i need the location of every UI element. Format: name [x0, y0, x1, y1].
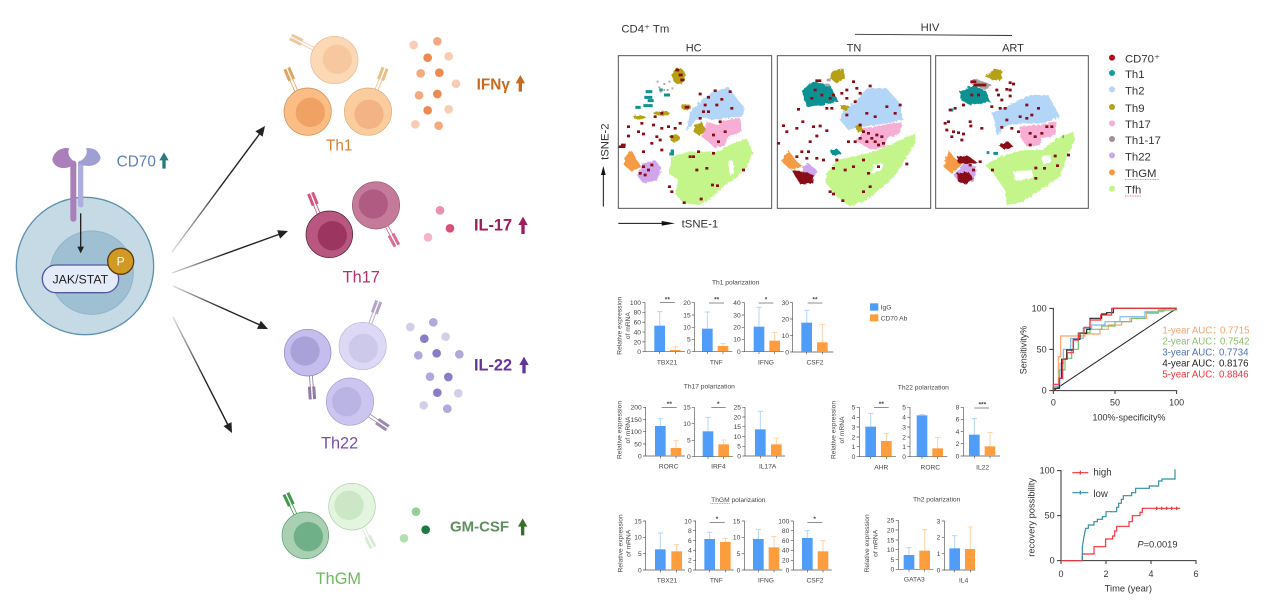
icon: phosphate: P — [117, 255, 125, 269]
legend: cell types: Th2 — [1125, 85, 1145, 97]
legend: cell types: Th1 — [1125, 69, 1145, 81]
axes and ticks: 50 — [1037, 344, 1047, 354]
axes and ticks: 50 — [1045, 511, 1055, 521]
legend: high and low — [1072, 467, 1112, 500]
bar chart: IRF4: 5 — [687, 438, 691, 445]
bar chart: TNF: 15 — [683, 312, 691, 319]
bar chart: CSF2: 20 — [782, 316, 789, 323]
bar chart: CSF2: 0 — [785, 349, 789, 356]
label: ThGM: ThGM — [316, 570, 361, 588]
bar chart: RORC: 4 — [902, 415, 906, 422]
bar chart: IL4: 2 — [937, 535, 941, 542]
bar chart: RORC — [902, 405, 947, 471]
panel: tSNE plot ART and legend — [936, 43, 1161, 208]
bar chart: RORC: 150 — [631, 417, 642, 424]
bar chart: IFNG: 40 — [733, 300, 741, 307]
bar chart: TNF: 4 — [688, 548, 692, 555]
icon: phosphate — [108, 248, 134, 274]
bar chart: IFNG: 0 — [737, 567, 741, 574]
bar chart: IL17A — [734, 405, 785, 471]
bar chart: IFNG: 0 — [737, 349, 741, 356]
axes and ticks: 0 — [1050, 556, 1055, 566]
AUC labels — [1162, 326, 1250, 381]
arrow: to Th22 — [173, 286, 268, 329]
legend: high and low: low — [1093, 489, 1108, 500]
axis title: Sensitivity: Sensitivity% — [1018, 326, 1028, 374]
curve: high — [1061, 507, 1180, 561]
bar chart: CSF2: ** — [812, 297, 818, 304]
panel: tSNE plots HC and TN — [600, 23, 931, 230]
bar chart: IFNG: IFNG — [758, 359, 774, 366]
icon: CD70 receptor — [52, 148, 101, 222]
bar chart: IRF4: 10 — [683, 421, 691, 428]
bar chart: TBX21: TBX21 — [657, 359, 677, 366]
bar chart: TNF: * — [716, 516, 719, 523]
y label: Th22 row: of mRNA — [839, 416, 846, 443]
axes and ticks: 0 — [1042, 386, 1047, 396]
panel: Th1 and Th17 cells — [283, 34, 528, 287]
panel: ThGM and Th2 polarization — [617, 497, 975, 585]
y label: Th2 row: Relative expression — [864, 514, 871, 572]
bar chart: TNF: TNF — [710, 359, 723, 366]
bar chart: RORC: ** — [667, 401, 672, 408]
bar chart: GATA3: 15 — [887, 537, 895, 544]
axes and ticks: 0 — [1058, 569, 1063, 579]
bar chart: GATA3: GATA3 — [904, 577, 925, 584]
bar chart: TBX21: 40 — [634, 329, 641, 336]
AUC labels: 0.8846 — [1219, 370, 1249, 381]
bar chart: TBX21: TBX21 — [657, 578, 677, 585]
bar chart: AHR: 0 — [852, 454, 856, 461]
bar chart: IL22: IL22 — [976, 464, 989, 471]
bar chart: IFNG: 10 — [733, 337, 741, 344]
label: Th17: Th17 — [343, 269, 380, 287]
bar chart: IFNG: 10 — [733, 535, 741, 542]
bar chart: RORC: RORC — [921, 464, 940, 471]
bar chart: TBX21: 60 — [634, 320, 641, 327]
bar chart: CSF2: 100 — [778, 518, 790, 525]
bar chart: TNF: 8 — [688, 528, 692, 535]
bar chart: GATA3: 25 — [887, 518, 895, 525]
bar chart: IL22: 8 — [956, 405, 960, 412]
bar chart: TBX21: 80 — [634, 310, 641, 317]
bar chart: TNF: 0 — [688, 567, 692, 574]
bar chart: TNF: TNF — [710, 578, 723, 585]
bar chart: AHR: 4 — [852, 415, 856, 422]
bar chart: RORC: RORC — [659, 464, 679, 471]
bar chart: IL22: 4 — [956, 429, 960, 436]
bar chart: IL4: 3 — [937, 518, 941, 525]
y label: Th2 row: of mRNA — [872, 529, 879, 557]
heading: TN: TN — [847, 43, 861, 55]
legend: IgG and CD70 Ab: CD70 Ab — [881, 315, 908, 322]
bar chart: GATA3: 20 — [887, 527, 895, 534]
bar chart: IFNG: 15 — [733, 518, 741, 525]
axis: tSNE-2 — [600, 123, 612, 207]
heading: Th1 polarization: Th1 polarization — [712, 279, 760, 286]
bar chart: IFNG: * — [765, 297, 768, 304]
bar chart: AHR: 3 — [852, 424, 856, 431]
bar chart: GATA3: 0 — [891, 567, 895, 574]
bar chart: TNF — [683, 297, 732, 366]
bar chart: TBX21: 20 — [634, 339, 641, 346]
bar chart: IRF4: * — [717, 401, 720, 408]
bar chart: RORC: 1 — [902, 444, 906, 451]
bar chart: AHR: ** — [879, 401, 884, 408]
icon: nucleus — [50, 231, 133, 314]
legend: cell types: Th22 — [1125, 151, 1151, 163]
label: GM-CSF up: GM-CSF — [450, 519, 509, 536]
bar chart: CSF2: 10 — [782, 333, 789, 340]
bar chart: CSF2: * — [813, 516, 816, 523]
bar chart: RORC — [631, 401, 685, 471]
bar chart: RORC: 100 — [631, 429, 642, 436]
bar chart: CSF2: CSF2 — [806, 578, 824, 585]
bar chart: IL4: IL4 — [959, 578, 969, 585]
arrow: to Th1 — [172, 126, 265, 252]
bar chart: AHR: 2 — [852, 434, 856, 441]
label: Th1: Th1 — [326, 138, 352, 155]
bar chart: TBX21: 0 — [637, 349, 641, 356]
legend: cell types: Th9 — [1125, 103, 1145, 115]
axis title: time: Time (year) — [1105, 584, 1152, 594]
JAK/STAT pill: JAK/STAT — [52, 272, 109, 286]
bar chart: TBX21 — [630, 296, 685, 366]
bar chart: RORC: 50 — [634, 441, 642, 448]
AUC labels: 0.8176 — [1219, 359, 1249, 370]
tSNE plot: HC — [618, 56, 772, 208]
bar chart: IFNG: 30 — [733, 312, 741, 319]
y label: Th17 row: of mRNA — [625, 416, 632, 443]
axis title: recovery possibility: recovery possibility — [1026, 478, 1036, 557]
bar chart: CSF2: 20 — [782, 558, 790, 565]
AUC labels: 0.7734 — [1219, 348, 1249, 359]
panel: Th22 polarization — [831, 384, 1000, 471]
panel: Th22 and ThGM cells — [282, 300, 529, 588]
GM-CSF cytokine dots — [400, 507, 430, 543]
JAK/STAT pill — [42, 265, 119, 293]
bar chart: TNF: ** — [714, 297, 720, 304]
heading: HIV with bracket line: HIV — [921, 22, 940, 34]
axes and ticks: 100 — [1032, 303, 1047, 313]
bar chart: IL22: *** — [978, 402, 987, 409]
arrow: to Th17 — [172, 230, 288, 273]
label: CD70 up — [117, 152, 169, 171]
axes and ticks: 50 — [1110, 397, 1120, 407]
axes and ticks: 100 — [1169, 397, 1184, 407]
label: IL-22 up — [474, 357, 529, 375]
bar chart: RORC: 200 — [631, 405, 642, 412]
bar chart: IL17A: 25 — [734, 405, 741, 412]
IL-22 cytokine dots — [406, 318, 464, 413]
bar chart: IL17A: 10 — [734, 434, 741, 441]
bar chart: GATA3: 5 — [891, 557, 895, 564]
bar chart: IRF4: IRF4 — [711, 464, 726, 471]
bar chart: TBX21: 100 — [630, 300, 641, 307]
y label: Th17 row: Relative expression — [617, 401, 624, 459]
AUC labels: 3-year AUC: — [1162, 348, 1215, 359]
tSNE plot: TN — [777, 56, 931, 208]
bar chart: CSF2: CSF2 — [806, 359, 824, 366]
bar chart: CSF2: 40 — [782, 548, 790, 555]
AUC labels: 0.7542 — [1220, 337, 1250, 348]
heading: Th2 polarization: Th2 polarization — [913, 497, 961, 504]
bar chart: IFNG: 5 — [737, 551, 741, 558]
panel: Th1 and Th17 polarization — [617, 279, 908, 471]
AUC labels: 5-year AUC: — [1162, 370, 1215, 381]
heading: CD4+ Tm: CD4⁺ Tm — [621, 23, 669, 35]
legend: IgG and CD70 Ab: IgG — [881, 304, 891, 311]
bar chart: IL4: 0 — [937, 567, 941, 574]
bar chart: TNF: 6 — [688, 538, 692, 545]
bar chart: RORC: 2 — [902, 434, 906, 441]
axes and ticks: 6 — [1193, 569, 1198, 579]
bar chart: TNF: 20 — [683, 300, 691, 307]
bar chart: IRF4 — [683, 401, 733, 471]
bar chart: CSF2: 60 — [782, 538, 790, 545]
bar chart: TNF: 5 — [687, 337, 691, 344]
axis: tSNE-2: tSNE-2 — [600, 123, 612, 160]
AUC labels: 0.7715 — [1220, 326, 1250, 337]
bar chart: IRF4: 0 — [687, 454, 691, 461]
IFN-gamma cytokine dots — [409, 37, 460, 130]
legend: cell types: CD70⁺ — [1125, 53, 1160, 65]
label: IFN-gamma up — [477, 75, 525, 93]
icon: cell body — [16, 197, 154, 335]
bar chart: TNF — [684, 516, 734, 585]
axes and ticks — [1032, 303, 1184, 407]
bar chart: TNF: 0 — [687, 349, 691, 356]
bar chart: IL22: 2 — [956, 441, 960, 448]
axes and ticks: 0 — [1051, 397, 1056, 407]
bar chart: TNF: 2 — [688, 558, 692, 565]
AUC labels: 1-year AUC： — [1162, 326, 1222, 337]
P value: P=0.0019 — [1137, 540, 1178, 550]
bar chart: AHR: AHR — [874, 464, 889, 471]
bar chart: IL17A: 20 — [734, 414, 741, 421]
bar chart: CSF2: 80 — [782, 528, 790, 535]
curve: low — [1082, 469, 1175, 561]
bar chart: IL17A: 15 — [734, 424, 741, 431]
ROC curves — [1053, 308, 1177, 391]
bar chart: RORC: 5 — [902, 405, 906, 412]
axes and ticks: 2 — [1103, 569, 1108, 579]
bar chart: TNF: 10 — [683, 325, 691, 332]
axis: tSNE-1 — [618, 218, 718, 230]
bar chart: IL17A: IL17A — [759, 464, 777, 471]
AUC labels: 4-year AUC: — [1162, 359, 1215, 370]
tSNE plot: ART — [936, 56, 1088, 208]
bar chart: IL22: 6 — [956, 417, 960, 424]
axes and ticks — [1040, 466, 1198, 579]
legend: cell types: ThGM — [1125, 168, 1156, 180]
bar chart: GATA3: 10 — [887, 547, 895, 554]
bar chart: IL17A: 5 — [737, 444, 741, 451]
heading: ART: ART — [1002, 43, 1024, 55]
y label: ThGM row: of mRNA — [626, 529, 633, 557]
bar chart: CSF2 — [782, 297, 833, 366]
legend: cell types: Tfh — [1125, 184, 1141, 196]
bar chart: IL22 — [956, 402, 1000, 471]
axis title: specificity: 100%-specificity% — [1093, 413, 1165, 423]
arrow: receptor to JAK/STAT — [77, 213, 84, 253]
bar chart: TBX21: 5 — [638, 551, 642, 558]
bar chart: IL4: 1 — [937, 551, 941, 558]
panel: CD70 signalling cell — [16, 148, 169, 335]
IL-17 cytokine dots — [424, 206, 454, 242]
bar chart: RORC: 0 — [902, 454, 906, 461]
axes and ticks: 4 — [1148, 569, 1153, 579]
Th17 cells — [306, 182, 400, 258]
label: IL-17 up: IL-17 — [474, 217, 512, 235]
bar chart: CSF2 — [778, 516, 832, 585]
bar chart: AHR — [852, 401, 896, 471]
y label: Th22 row: Relative expression — [831, 401, 838, 459]
bar chart: CSF2: 0 — [786, 567, 790, 574]
heading: HC: HC — [686, 42, 702, 54]
axes and ticks: 100 — [1040, 466, 1055, 476]
legend: high and low: high — [1093, 467, 1112, 478]
bar chart: IFNG — [733, 297, 784, 366]
bar chart: RORC: 3 — [902, 424, 906, 431]
bar chart: TBX21: 10 — [634, 535, 642, 542]
y label: ThGM row: Relative expression — [617, 514, 624, 572]
label: IFN-gamma up: IFNγ — [477, 76, 510, 93]
bar chart: RORC: 0 — [638, 453, 642, 460]
y label: Th1 row: Relative expression — [617, 296, 624, 355]
bar chart: CSF2: 30 — [782, 300, 789, 307]
bar chart: IL4 — [937, 518, 975, 585]
bar chart: AHR: 5 — [852, 405, 856, 412]
legend: cell types — [1109, 53, 1161, 196]
legend: IgG and CD70 Ab — [870, 303, 908, 322]
bar chart: GATA3 — [887, 518, 933, 584]
bar chart: TBX21 — [634, 518, 685, 585]
legend: cell types: Th17 — [1125, 119, 1151, 131]
AUC labels: 2-year AUC： — [1162, 337, 1222, 348]
heading: ThGM polarization: ThGM polarization — [711, 497, 766, 504]
bar chart: IFNG — [733, 518, 782, 585]
bar chart: TNF: 10 — [684, 518, 692, 525]
label: Th22: Th22 — [321, 434, 358, 452]
Th22 cells — [284, 300, 390, 431]
ThGM cells — [282, 483, 376, 559]
Th1 cells — [283, 34, 392, 135]
bar chart: AHR: 1 — [852, 444, 856, 451]
bar chart: TBX21: 15 — [634, 518, 642, 525]
panel: recovery survival chart — [1026, 466, 1198, 594]
axis: tSNE-1: tSNE-1 — [682, 218, 718, 230]
bar chart: IL17A: 0 — [737, 453, 741, 460]
bar chart: IFNG: 20 — [733, 325, 741, 332]
legend: cell types: Th1-17 — [1125, 135, 1161, 147]
label: CD70 up: CD70 — [117, 154, 156, 171]
bar chart: IFNG: IFNG — [758, 578, 774, 585]
bar chart: TBX21: 0 — [638, 567, 642, 574]
heading: Th17 polarization: Th17 polarization — [684, 384, 735, 391]
y label: Th1 row: of mRNA — [625, 312, 632, 339]
bar chart: TBX21: ** — [665, 296, 670, 303]
label: IL-22 up: IL-22 — [474, 357, 512, 375]
bar chart: IRF4: 15 — [683, 405, 691, 412]
heading: Th22 polarization: Th22 polarization — [898, 384, 949, 391]
panel: ROC chart — [1018, 303, 1250, 423]
arrow: to ThGM — [173, 317, 232, 433]
bar chart: IL22: 0 — [956, 453, 960, 460]
